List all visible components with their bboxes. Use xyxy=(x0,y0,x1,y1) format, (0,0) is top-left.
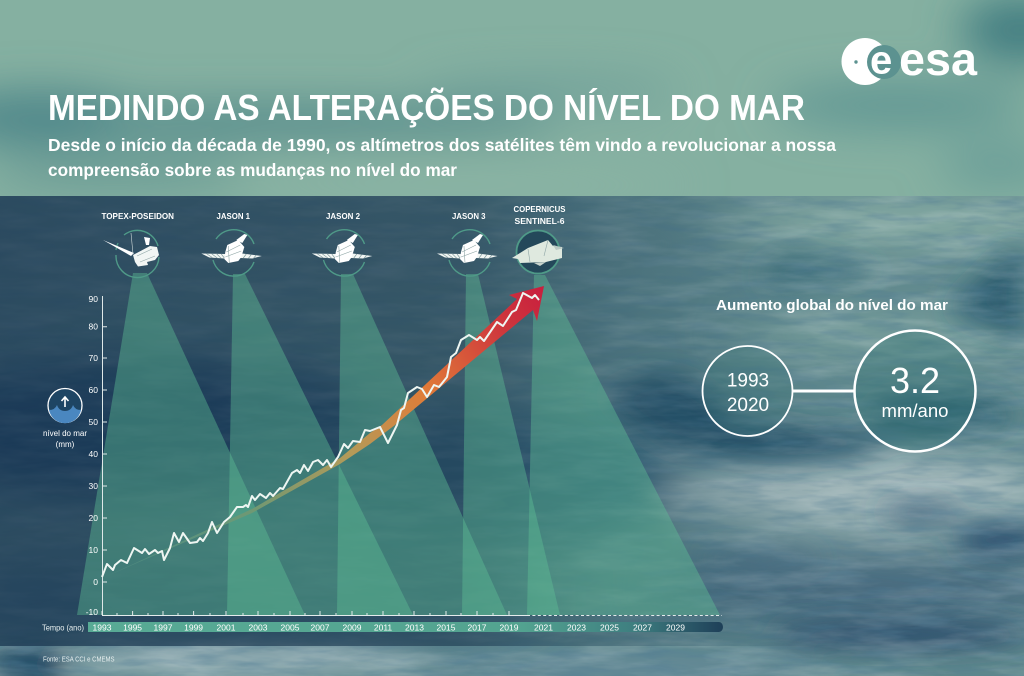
background: teal header sky xyxy=(0,0,1024,197)
subtitle: compreensão sobre as mudanças no nível do mar xyxy=(48,160,457,180)
beam: Jason 2 xyxy=(337,274,507,615)
stat: rate circle: 3.2 xyxy=(890,360,940,401)
y axis labels: 0 xyxy=(93,577,98,587)
logo: esa xyxy=(842,33,977,85)
timeline bar: 2021 xyxy=(534,622,553,632)
icon: Sentinel-6 satellite xyxy=(512,230,564,274)
timeline bar: 2027 xyxy=(633,622,652,632)
satellite label: Copernicus Sentinel-6: SENTINEL-6 xyxy=(514,216,565,226)
y axis title xyxy=(43,429,87,449)
timeline bar: 2023 xyxy=(567,622,586,632)
dark chart panel backdrop xyxy=(0,196,1024,646)
timeline bar: 2029 xyxy=(666,622,685,632)
y axis xyxy=(102,296,107,615)
satellite coverage beams xyxy=(77,273,720,615)
y axis title: nível do mar xyxy=(43,429,87,438)
timeline bar: 2003 xyxy=(249,622,268,632)
timeline bar: 1993 xyxy=(93,622,112,632)
timeline bar: 1997 xyxy=(154,622,173,632)
stat: period circle: 1993 xyxy=(727,370,769,392)
x axis xyxy=(102,611,722,616)
timeline bar: 1995 xyxy=(123,622,142,632)
timeline bar: 2007 xyxy=(311,622,330,632)
subtitle xyxy=(48,135,836,180)
y axis labels: 40 xyxy=(89,449,98,459)
background: ocean photo xyxy=(0,196,1024,676)
icon: Jason 3 satellite xyxy=(437,230,498,276)
y axis title: (mm) xyxy=(56,440,75,449)
timeline bar: 2015 xyxy=(437,622,456,632)
y axis labels: 10 xyxy=(89,545,98,555)
water level icon xyxy=(48,388,82,423)
y axis labels: -10 xyxy=(86,607,98,617)
title: MEDINDO AS ALTERAÇÕES DO NÍVEL DO MAR xyxy=(48,86,805,128)
timeline bar: 2017 xyxy=(468,622,487,632)
timeline bar: 2011 xyxy=(374,622,392,632)
icon: Jason 1 satellite xyxy=(201,230,262,276)
icon: Jason 2 satellite xyxy=(312,230,372,276)
satellite label: Jason 3: JASON 3 xyxy=(452,211,486,221)
sea level data line xyxy=(102,293,539,577)
satellite label: Copernicus Sentinel-6 xyxy=(514,204,566,226)
stat: rate circle: mm/ano xyxy=(882,401,948,421)
y axis labels: 30 xyxy=(89,481,98,491)
timeline bar xyxy=(88,622,723,632)
stat: rate circle xyxy=(854,330,976,452)
timeline bar: 1999 xyxy=(184,622,203,632)
satellite label: Jason 1: JASON 1 xyxy=(216,211,250,221)
satellite label: Copernicus Sentinel-6: COPERNICUS xyxy=(514,204,566,214)
y axis labels: 70 xyxy=(89,353,98,363)
source: Fonte: ESA CCI e CMEMS xyxy=(43,656,115,664)
logo: esa: e xyxy=(870,38,892,82)
y axis labels: 20 xyxy=(89,513,98,523)
x axis title: Tempo (ano) xyxy=(42,622,84,632)
heading: global rise: Aumento global do nível do mar xyxy=(716,298,948,314)
y axis labels: 60 xyxy=(89,385,98,395)
timeline bar: 2009 xyxy=(343,622,362,632)
y axis labels xyxy=(86,294,98,617)
connector xyxy=(792,390,854,392)
y axis labels: 90 xyxy=(89,294,98,304)
beam: Jason 1 xyxy=(227,274,413,615)
beam: Sentinel-6 xyxy=(527,275,720,615)
timeline bar: 2025 xyxy=(600,622,619,632)
timeline bar: 2001 xyxy=(217,622,236,632)
satellite label: Topex-Poseidon: TOPEX-POSEIDON xyxy=(102,211,174,221)
subtitle: Desde o início da década de 1990, os altímetros dos satélites têm vindo a revolucionar a nossa xyxy=(48,135,836,155)
timeline bar: 2005 xyxy=(281,622,300,632)
stat: period circle: 2020 xyxy=(727,395,769,416)
logo: esa: esa xyxy=(899,33,977,85)
stat: period circle xyxy=(702,346,792,436)
beam: Topex-Poseidon xyxy=(77,273,305,615)
satellite label: Jason 2: JASON 2 xyxy=(326,211,360,221)
y axis labels: 50 xyxy=(89,417,98,427)
timeline bar: 2013 xyxy=(405,622,424,632)
y axis labels: 80 xyxy=(89,322,98,332)
timeline bar: 2019 xyxy=(500,622,519,632)
beam: Jason 3 xyxy=(462,274,560,615)
icon: Topex-Poseidon satellite xyxy=(103,230,159,278)
trend arrow xyxy=(105,286,544,577)
